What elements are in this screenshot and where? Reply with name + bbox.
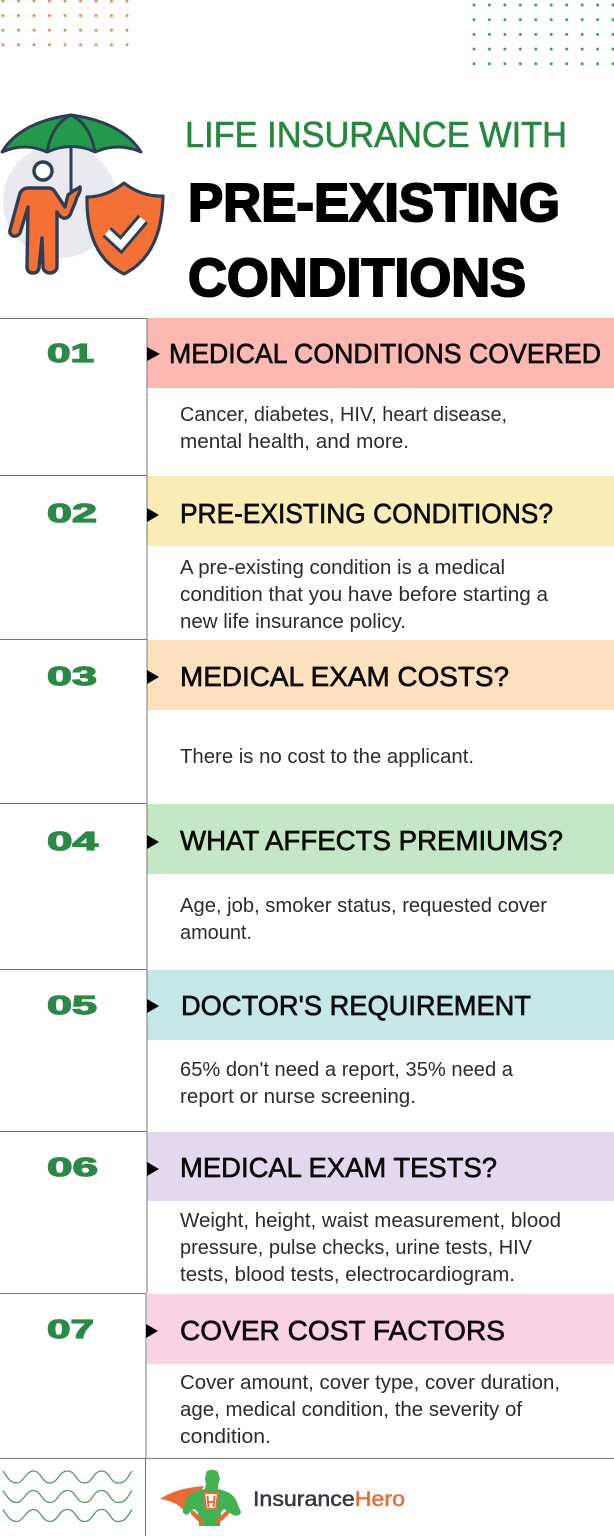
body text — [180, 1371, 560, 1448]
arrow — [147, 1162, 159, 1176]
title — [185, 114, 567, 308]
body text — [180, 403, 507, 453]
panel: 02 pre-existing conditions — [0, 476, 614, 639]
decorative green waves — [3, 1471, 132, 1522]
arrow — [147, 508, 159, 522]
heading: WHAT AFFECTS PREMIUMS? — [180, 825, 563, 856]
body text: amount. — [180, 921, 252, 944]
decorative green dots — [468, 0, 614, 70]
icon: person under umbrella with shield — [2, 115, 163, 274]
heading: MEDICAL EXAM COSTS? — [180, 661, 509, 692]
heading: PRE-EXISTING CONDITIONS? — [180, 498, 553, 529]
body text: pressure, pulse checks, urine tests, HIV — [180, 1236, 532, 1259]
number 04: 04 — [47, 826, 99, 856]
body text: tests, blood tests, electrocardiogram. — [180, 1263, 515, 1286]
body text: new life insurance policy. — [180, 610, 406, 633]
body text: condition. — [180, 1425, 271, 1448]
arrow — [147, 670, 159, 684]
subtitle: life insurance with: LIFE INSURANCE WITH — [185, 114, 567, 155]
body text — [180, 894, 547, 944]
wordmark: Insurance Hero — [253, 1488, 405, 1511]
number 05: 05 — [47, 990, 97, 1020]
heading: MEDICAL EXAM TESTS? — [180, 1152, 497, 1183]
number 07: 07 — [47, 1314, 94, 1344]
panel: 03 medical exam costs — [0, 639, 614, 803]
number 02: 02 — [47, 498, 97, 528]
body text — [180, 1209, 561, 1286]
panel: 05 doctor's requirement — [0, 969, 614, 1131]
panel: 04 what affects premiums — [0, 803, 614, 969]
heading: MEDICAL CONDITIONS COVERED — [169, 338, 601, 369]
body text: mental health, and more. — [180, 430, 409, 453]
body text: age, medical condition, the severity of — [180, 1398, 522, 1421]
decorative orange dots — [0, 0, 132, 50]
body text: There is no cost to the applicant. — [180, 745, 474, 768]
arrow — [147, 835, 159, 849]
body text — [180, 1058, 514, 1108]
panel: 07 cover cost factors — [0, 1293, 614, 1458]
body text: A pre-existing condition is a medical — [180, 556, 505, 579]
number 06: 06 — [47, 1152, 98, 1182]
body text: Weight, height, waist measurement, blood — [180, 1209, 561, 1232]
number 03: 03 — [47, 661, 97, 691]
panel: 01 medical conditions covered — [0, 318, 614, 476]
heading line: pre-existing: PRE-EXISTING — [188, 173, 560, 233]
arrow — [146, 1324, 158, 1338]
number 01: 01 — [47, 338, 94, 368]
body text: 65% don't need a report, 35% need a — [180, 1058, 514, 1081]
heading line: conditions: CONDITIONS — [188, 248, 526, 308]
body text: Age, job, smoker status, requested cover — [180, 894, 547, 917]
body text — [180, 556, 549, 633]
arrow — [147, 999, 159, 1013]
arrow — [147, 347, 160, 361]
icon: hero mascot — [160, 1470, 241, 1526]
body text: report or nurse screening. — [180, 1085, 416, 1108]
body text: Cover amount, cover type, cover duration, — [180, 1371, 560, 1394]
heading: COVER COST FACTORS — [180, 1315, 505, 1346]
heading: DOCTOR'S REQUIREMENT — [181, 990, 531, 1021]
body text: condition that you have before starting a — [180, 583, 549, 606]
body text: Cancer, diabetes, HIV, heart disease, — [180, 403, 507, 426]
logo: InsuranceHero — [160, 1470, 405, 1526]
panel: 06 medical exam tests — [0, 1131, 614, 1293]
